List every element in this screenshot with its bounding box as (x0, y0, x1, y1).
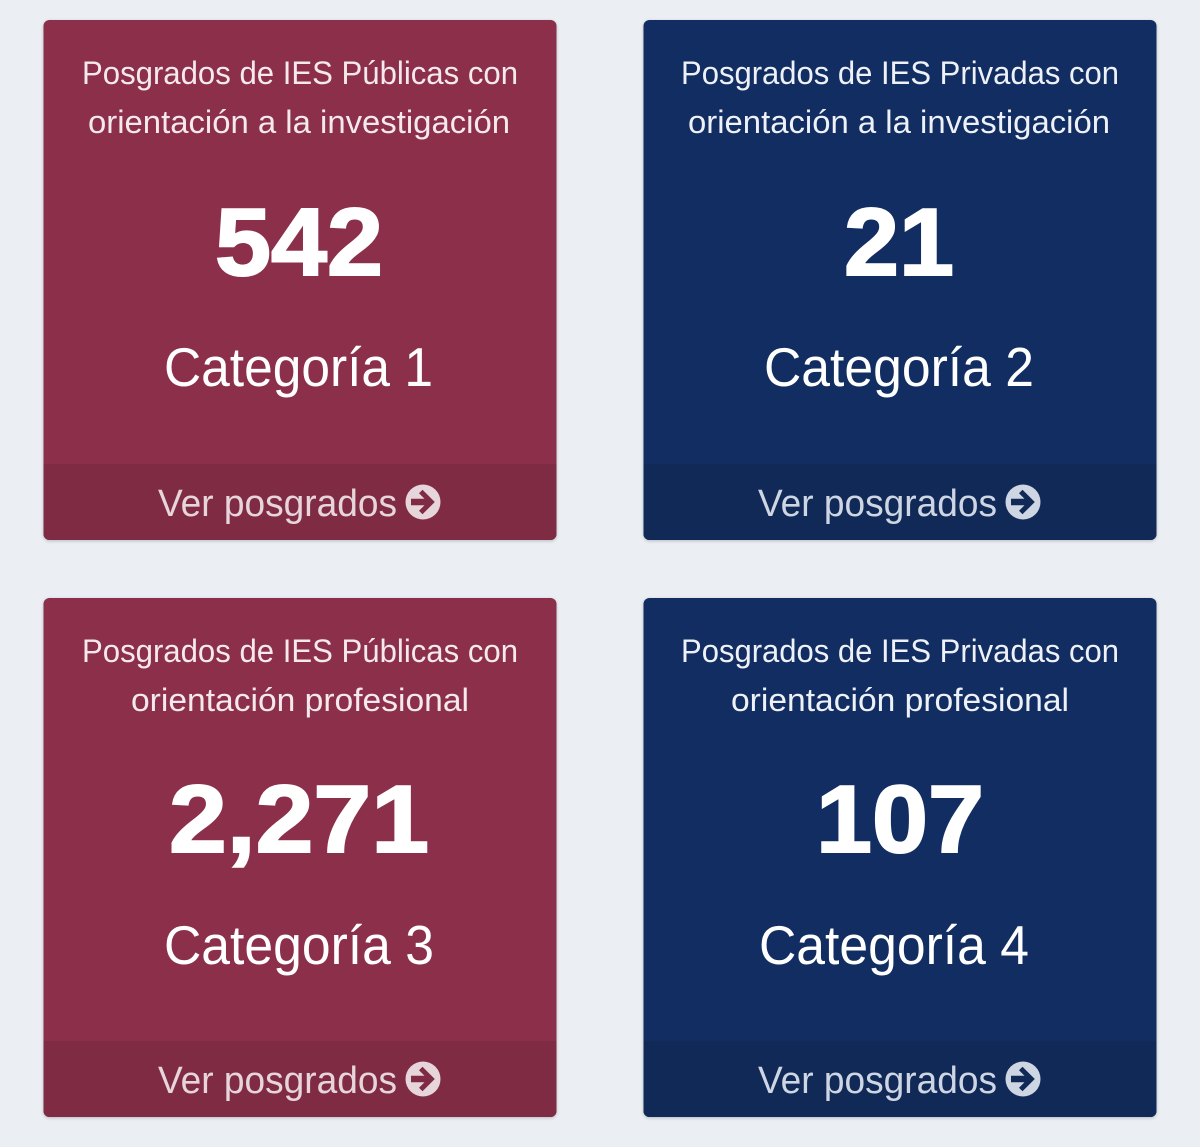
heading: IES Privadas profesional: Posgrados de IES Privadas con (681, 633, 1119, 669)
link: Ver posgrados: Ver posgrados (158, 1060, 397, 1102)
icon: arrow circle (1006, 1062, 1040, 1096)
number: 2,271: 2,271 (169, 766, 429, 873)
panel: Categoría 4 (644, 598, 1156, 1117)
panel: Categoría 1 (44, 20, 556, 540)
heading: IES Privadas investigación: orientación a la investigación (688, 104, 1110, 140)
heading: IES Privadas profesional: orientación profesional (731, 682, 1069, 718)
label: Categoría 3: Categoría 3 (164, 914, 434, 976)
heading: IES Públicas investigación (82, 55, 518, 140)
link: Ver posgrados: Ver posgrados (758, 1060, 997, 1102)
heading: IES Públicas investigación: Posgrados de IES Públicas con (82, 55, 518, 91)
icon: arrow circle (406, 1062, 440, 1096)
label: Categoría 4: Categoría 4 (759, 914, 1029, 976)
number: 542: 542 (215, 189, 383, 296)
icon: arrow circle (406, 484, 440, 520)
heading: IES Públicas investigación: orientación a la investigación (88, 104, 510, 140)
icon: arrow circle (1006, 484, 1040, 520)
panel: Categoría 3 (44, 598, 556, 1117)
heading: IES Públicas profesional: Posgrados de IES Públicas con (82, 633, 518, 669)
label: Categoría 1: Categoría 1 (164, 336, 433, 398)
link: Ver posgrados: Ver posgrados (758, 483, 997, 525)
number: 107: 107 (816, 766, 984, 873)
link: Ver posgrados: Ver posgrados (158, 483, 397, 525)
label: Categoría 2: Categoría 2 (764, 336, 1034, 398)
heading: IES Privadas profesional (681, 633, 1119, 718)
number: 21: 21 (844, 189, 954, 296)
heading: IES Públicas profesional: orientación profesional (131, 682, 469, 718)
panel: Categoría 2 (644, 20, 1156, 540)
heading: IES Públicas profesional (82, 633, 518, 718)
heading: IES Privadas investigación (681, 55, 1119, 140)
heading: IES Privadas investigación: Posgrados de IES Privadas con (681, 55, 1119, 91)
